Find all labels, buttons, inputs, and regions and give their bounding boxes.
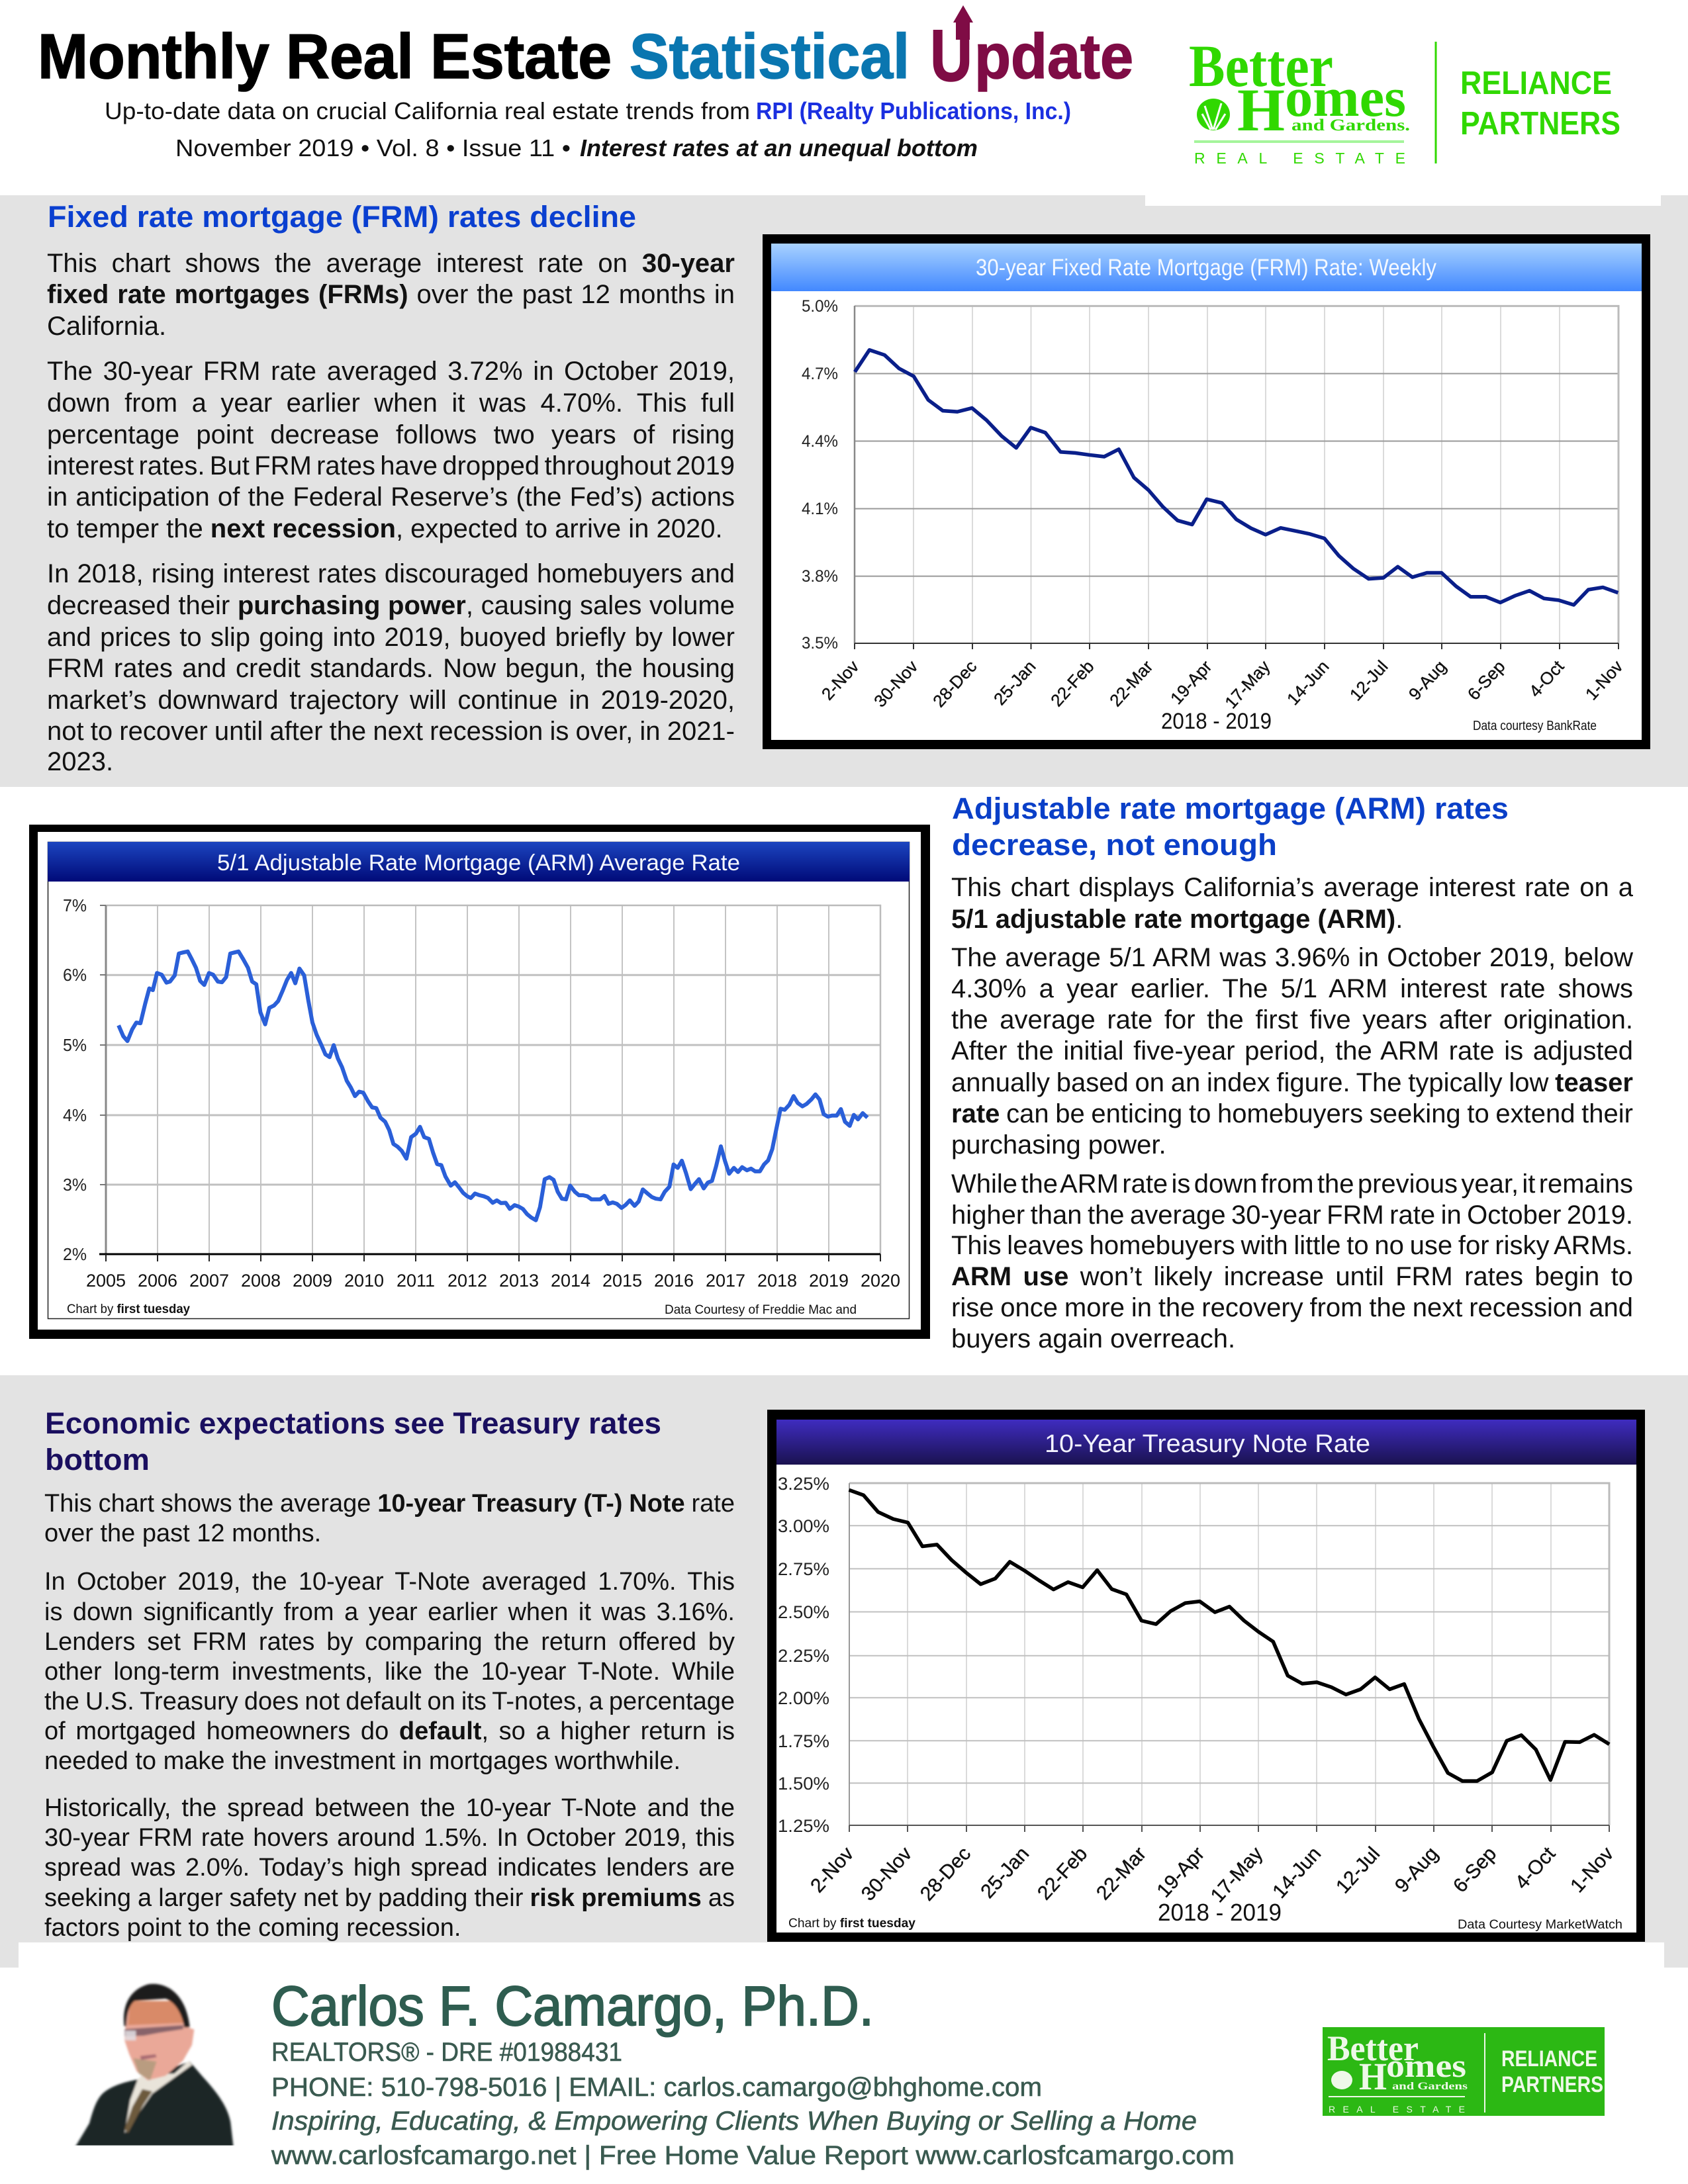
chart: 5/1 ARM average rate: 2%	[63, 1244, 87, 1264]
text block: Treasury section: Lenders set FRM rates by comparing the return offered by	[44, 1628, 735, 1656]
chart: 30-year FRM weekly rate: 3.8%	[802, 567, 838, 586]
text block: FRM section: decreased their purchasing power, causing sales volume	[47, 591, 735, 620]
text block: ARM section: purchasing power.	[951, 1130, 1166, 1160]
text block: Treasury section: of mortgaged homeowners do default, so a higher return is	[44, 1717, 735, 1745]
chart: 30-year FRM weekly rate: 28-Dec	[929, 657, 980, 711]
title: Statistical	[630, 21, 910, 92]
chart: 5/1 ARM average rate: Data Courtesy of Freddie Mac and	[665, 1303, 857, 1317]
chart: 30-year FRM weekly rate: 4.4%	[802, 432, 838, 451]
text block: FRM section: In 2018, rising interest rates discouraged homebuyers and	[47, 559, 735, 588]
text block: Treasury section: other long-term investments, like the 10-year T-Note. While	[44, 1658, 735, 1686]
text block: FRM section: down from a year earlier when it was 4.70%. This full	[47, 388, 735, 418]
text block: ARM section: While the ARM rate is down from the previous year, it remains	[951, 1169, 1633, 1199]
text block: Treasury section: is down significantly from a year earlier when it was 3.16%.	[44, 1598, 735, 1626]
chart: 5/1 ARM average rate: 2006	[138, 1271, 177, 1291]
text block: ARM section: rise once more in the recovery from the next recession and	[951, 1293, 1633, 1322]
chart: 10-year Treasury note rate	[767, 1410, 1645, 1942]
subtitle: Interest rates at an unequal bottom	[580, 134, 978, 161]
chart: 10-year Treasury note rate: 3.00%	[778, 1516, 829, 1536]
text block: Treasury section: needed to make the investment in mortgages worthwhile.	[44, 1747, 680, 1775]
contact details: www.carlosfcamargo.net | Free Home Value Report www.carlosfcamargo.com	[271, 2141, 1235, 2170]
chart: 10-year Treasury note rate: 1-Nov	[1566, 1843, 1618, 1897]
footer logo: green Better Homes and Gardens: RELIANCE	[1501, 2046, 1597, 2071]
chart: 5/1 ARM average rate: 4%	[63, 1105, 87, 1125]
contact details: Carlos F. Camargo, Ph.D.	[271, 1975, 874, 2037]
chart: 10-year Treasury note rate: 12-Jul	[1332, 1843, 1384, 1897]
chart: 30-year FRM weekly rate: 22-Feb	[1047, 657, 1098, 710]
heading: FRM section: Fixed rate mortgage (FRM) rates decline	[48, 200, 636, 234]
text block: ARM section: 5/1 adjustable rate mortgage (ARM).	[951, 905, 1403, 934]
text block: ARM section: buyers again overreach.	[951, 1324, 1235, 1353]
chart: 30-year FRM weekly rate: 12-Jul	[1346, 657, 1391, 705]
text block: ARM section: the average rate for the first five years after origination.	[951, 1005, 1633, 1034]
chart: 10-year Treasury note rate: Data Courtesy MarketWatch	[1458, 1918, 1622, 1932]
chart: 30-year FRM weekly rate: 17-May	[1221, 657, 1274, 712]
chart: 30-year FRM weekly rate: 6-Sep	[1464, 657, 1509, 704]
contact details: Inspiring, Educating, & Empowering Clients When Buying or Selling a Home	[271, 2107, 1197, 2136]
title: Monthly Real Estate	[38, 21, 612, 92]
chart: 10-year Treasury note rate: 2.00%	[778, 1688, 829, 1708]
text block: ARM section: annually based on an index figure. The typically low teaser	[951, 1068, 1633, 1097]
chart: 10-year Treasury note rate: 2-Nov	[806, 1843, 858, 1897]
text block: Treasury section: seeking a larger safety net by padding their risk premiums as	[44, 1884, 735, 1912]
footer logo: green Better Homes and Gardens: REAL ESTATE	[1329, 2104, 1465, 2115]
chart: 5/1 ARM average rate: 2019	[809, 1271, 849, 1291]
chart: 10-year Treasury note rate: 30-Nov	[857, 1843, 916, 1905]
text block: ARM section: higher than the average 30-year FRM rate in October 2019.	[951, 1201, 1633, 1230]
chart: 5/1 ARM average rate: 7%	[63, 895, 87, 915]
chart: 10-year Treasury note rate: 25-Jan	[976, 1843, 1033, 1903]
contact details: PHONE: 510-798-5016 | EMAIL: carlos.camargo@bhghome.com	[271, 2073, 1042, 2102]
text block: FRM section: 2023.	[47, 747, 113, 776]
footer logo: green Better Homes and Gardens: and Gardens	[1392, 2081, 1468, 2092]
footer logo: green Better Homes and Gardens: omes	[1386, 2047, 1466, 2084]
text block: ARM section: After the initial five-year period, the ARM rate is adjusted	[951, 1036, 1633, 1066]
text block: ARM section	[951, 873, 1634, 1353]
text block: Treasury section: factors point to the coming recession.	[44, 1914, 461, 1942]
chart: 5/1 ARM average rate: 6%	[63, 965, 87, 985]
chart: 10-year Treasury note rate: 4-Oct	[1511, 1843, 1560, 1893]
chart: 10-year Treasury note rate: 22-Feb	[1033, 1843, 1092, 1904]
chart: 30-year FRM weekly rate: 1-Nov	[1581, 657, 1626, 704]
chart: 30-year FRM weekly rate: 5.0%	[802, 297, 838, 316]
chart: 5/1 ARM average rate	[29, 825, 930, 1339]
footer white panel top	[19, 1942, 1664, 1969]
chart: 10-year Treasury note rate: 14-Jun	[1268, 1843, 1325, 1903]
chart: 10-year Treasury note rate: 1.75%	[778, 1731, 829, 1751]
chart: 10-year Treasury note rate: 1.25%	[778, 1816, 829, 1836]
chart: 10-year Treasury note rate: 22-Mar	[1092, 1843, 1150, 1904]
chart: 10-year Treasury note rate: 17-May	[1207, 1843, 1267, 1907]
logo: Better Homes and Gardens Reliance Partners: H	[1237, 76, 1285, 144]
text block: Treasury section	[44, 1490, 735, 1942]
subtitle: November 2019 • Vol. 8 • Issue 11 •	[175, 134, 571, 161]
chart: 10-year Treasury note rate: 9-Aug	[1391, 1843, 1442, 1897]
chart: 30-year FRM weekly rate: 19-Apr	[1166, 657, 1216, 708]
text block: ARM section: This chart displays California’s average interest rate on a	[951, 873, 1633, 902]
text block: Treasury section: 30-year FRM rate hovers around 1.5%. In October 2019, this	[44, 1824, 735, 1852]
text block: FRM section	[47, 249, 735, 776]
chart: 5/1 ARM average rate: 5/1 Adjustable Rate Mortgage (ARM) Average Rate	[217, 850, 740, 876]
text block: Treasury section: the U.S. Treasury does not default on its T-notes, a percentage	[44, 1688, 735, 1715]
chart: 5/1 ARM average rate: 2011	[397, 1271, 435, 1291]
chart: 30-year FRM weekly rate: 9-Aug	[1405, 657, 1450, 704]
chart: 10-year Treasury note rate: 28-Dec	[916, 1843, 975, 1905]
chart: 10-year Treasury note rate: 10-Year Treasury Note Rate	[1045, 1430, 1370, 1458]
logo: Better Homes and Gardens Reliance Partners	[1189, 34, 1620, 167]
chart: 5/1 ARM average rate: 3%	[63, 1175, 87, 1195]
chart: 30-year FRM weekly rate: 4.7%	[802, 365, 838, 383]
chart: 5/1 ARM average rate: 2008	[241, 1271, 281, 1291]
chart: 5/1 ARM average rate: 2020	[861, 1271, 900, 1291]
text block: FRM section: fixed rate mortgages (FRMs) over the past 12 months in	[47, 280, 735, 309]
text block: FRM section: FRM rates and credit standards. Now begun, the housing	[47, 654, 735, 683]
title: U	[930, 15, 972, 97]
text block: Treasury section: over the past 12 months.	[44, 1520, 321, 1547]
subtitle: Up-to-date data on crucial California real estate trends from	[105, 97, 750, 124]
text block: ARM section: rate can be enticing to homebuyers seeking to extend their	[951, 1099, 1633, 1128]
chart: 5/1 ARM average rate: 2016	[654, 1271, 694, 1291]
chart: 5/1 ARM average rate: 2007	[189, 1271, 229, 1291]
text block: Treasury section: Historically, the spread between the 10-year T-Note and the	[44, 1794, 735, 1822]
chart: 10-year Treasury note rate: 19-Apr	[1152, 1843, 1209, 1902]
chart: 5/1 ARM average rate: Chart by first tuesday	[67, 1302, 190, 1316]
title	[38, 5, 1133, 97]
text block: FRM section: The 30-year FRM rate averaged 3.72% in October 2019,	[47, 357, 735, 386]
text block: ARM section: This leaves homebuyers with little to no use for risky ARMs.	[951, 1231, 1633, 1260]
chart: 5/1 ARM average rate: 2005	[86, 1271, 126, 1291]
footer logo: green Better Homes and Gardens	[1323, 2027, 1605, 2116]
chart: 30-year FRM weekly rate: 30-year Fixed Rate Mortgage (FRM) Rate: Weekly	[976, 255, 1436, 281]
logo: Better Homes and Gardens Reliance Partners: Better	[1189, 34, 1333, 99]
text block: ARM section: ARM use won’t likely increase until FRM rates begin to	[951, 1262, 1633, 1291]
heading: ARM section	[952, 792, 1509, 862]
text block: FRM section: interest rates. But FRM rates have dropped throughout 2019	[47, 451, 735, 480]
heading: Treasury section: Economic expectations see Treasury rates	[45, 1406, 661, 1440]
chart: 10-year Treasury note rate: 1.50%	[778, 1774, 829, 1794]
chart: 30-year FRM weekly rate: 3.5%	[802, 634, 838, 653]
chart: 30-year FRM weekly rate: 14-Jun	[1283, 657, 1333, 709]
text block: ARM section: The average 5/1 ARM was 3.96% in October 2019, below	[951, 943, 1633, 972]
subtitle	[105, 97, 1071, 161]
logo: Better Homes and Gardens Reliance Partners: REAL ESTATE	[1194, 150, 1405, 167]
chart: 30-year FRM weekly rate: 2-Nov	[818, 657, 863, 704]
text block: Treasury section: In October 2019, the 10-year T-Note averaged 1.70%. This	[44, 1568, 735, 1596]
background band: top gray section	[0, 195, 1688, 787]
text block: FRM section: This chart shows the average interest rate on 30-year	[47, 249, 735, 278]
header logo white tab	[1145, 195, 1661, 206]
contact details	[271, 1975, 1235, 2170]
chart: 10-year Treasury note rate: 2018 - 2019	[1158, 1899, 1282, 1926]
heading: ARM section: decrease, not enough	[952, 828, 1277, 862]
chart: 10-year Treasury note rate: 3.25%	[778, 1474, 829, 1494]
chart: 10-year Treasury note rate: 2.75%	[778, 1559, 829, 1579]
chart: 30-year FRM weekly rate: 4.1%	[802, 500, 838, 518]
chart: 10-year Treasury note rate: Chart by first tuesday	[788, 1917, 915, 1931]
text block: FRM section: California.	[47, 312, 166, 341]
chart: 30-year FRM weekly rate: 30-Nov	[870, 657, 921, 711]
chart: 5/1 ARM average rate: 2009	[293, 1271, 332, 1291]
heading: Treasury section	[45, 1406, 661, 1477]
text block: Treasury section: This chart shows the average 10-year Treasury (T-) Note rate	[44, 1490, 735, 1518]
chart: 10-year Treasury note rate: 2.50%	[778, 1602, 829, 1622]
chart: 30-year FRM weekly rate	[763, 234, 1650, 749]
text block: FRM section: in anticipation of the Federal Reserve’s (the Fed’s) actions	[47, 482, 735, 512]
contact details: REALTORS® - DRE #01988431	[271, 2038, 622, 2067]
chart: 30-year FRM weekly rate: 25-Jan	[990, 657, 1039, 709]
text block: ARM section: 4.30% a year earlier. The 5/1 ARM interest rate shows	[951, 974, 1633, 1003]
heading: ARM section: Adjustable rate mortgage (ARM) rates	[952, 792, 1509, 825]
chart: 5/1 ARM average rate: 2010	[344, 1271, 384, 1291]
background band: bottom gray section	[0, 1375, 1688, 1968]
chart: 30-year FRM weekly rate: 2018 - 2019	[1161, 709, 1272, 734]
subtitle: RPI (Realty Publications, Inc.)	[756, 97, 1071, 124]
logo: Better Homes and Gardens Reliance Partners: RELIANCE	[1460, 66, 1612, 101]
text block: Treasury section: spread was 2.0%. Today’s high spread indicates lenders are	[44, 1854, 735, 1882]
footer logo: green Better Homes and Gardens: PARTNERS	[1501, 2072, 1603, 2097]
footer logo: green Better Homes and Gardens: Better	[1327, 2028, 1419, 2068]
text block: FRM section: percentage point decrease follows two years of rising	[47, 420, 735, 449]
logo: Better Homes and Gardens Reliance Partners: PARTNERS	[1460, 106, 1620, 142]
chart: 5/1 ARM average rate: 2017	[706, 1271, 745, 1291]
title: pdate	[974, 21, 1133, 92]
chart: 30-year FRM weekly rate: 4-Oct	[1525, 656, 1568, 701]
chart: 10-year Treasury note rate: 2.25%	[778, 1646, 829, 1666]
text block: FRM section: and prices to slip going into 2019, buoyed briefly by lower	[47, 623, 735, 652]
chart: 5/1 ARM average rate: 2012	[447, 1271, 487, 1291]
chart: 5/1 ARM average rate: 2015	[602, 1271, 642, 1291]
chart: 30-year FRM weekly rate: Data courtesy BankRate	[1473, 719, 1597, 733]
text block: FRM section: market’s downward trajectory will continue in 2019-2020,	[47, 686, 735, 715]
text block: FRM section: to temper the next recession, expected to arrive in 2020.	[47, 514, 723, 543]
logo: Better Homes and Gardens Reliance Partners: and Gardens.	[1291, 116, 1410, 134]
chart: 5/1 ARM average rate: 5%	[63, 1035, 87, 1055]
chart: 5/1 ARM average rate: 2013	[499, 1271, 539, 1291]
icon: agent portrait	[74, 1982, 235, 2146]
chart: 5/1 ARM average rate: 2018	[757, 1271, 797, 1291]
footer logo: green Better Homes and Gardens: H	[1359, 2055, 1387, 2098]
chart: 10-year Treasury note rate: 6-Sep	[1449, 1843, 1501, 1897]
logo: Better Homes and Gardens Reliance Partners: omes	[1285, 67, 1406, 128]
chart: 30-year FRM weekly rate: 22-Mar	[1105, 657, 1157, 710]
chart: 5/1 ARM average rate: 2014	[551, 1271, 590, 1291]
heading: Treasury section: bottom	[45, 1443, 150, 1477]
text block: FRM section: not to recover until after the next recession is over, in 2021-	[47, 717, 735, 746]
